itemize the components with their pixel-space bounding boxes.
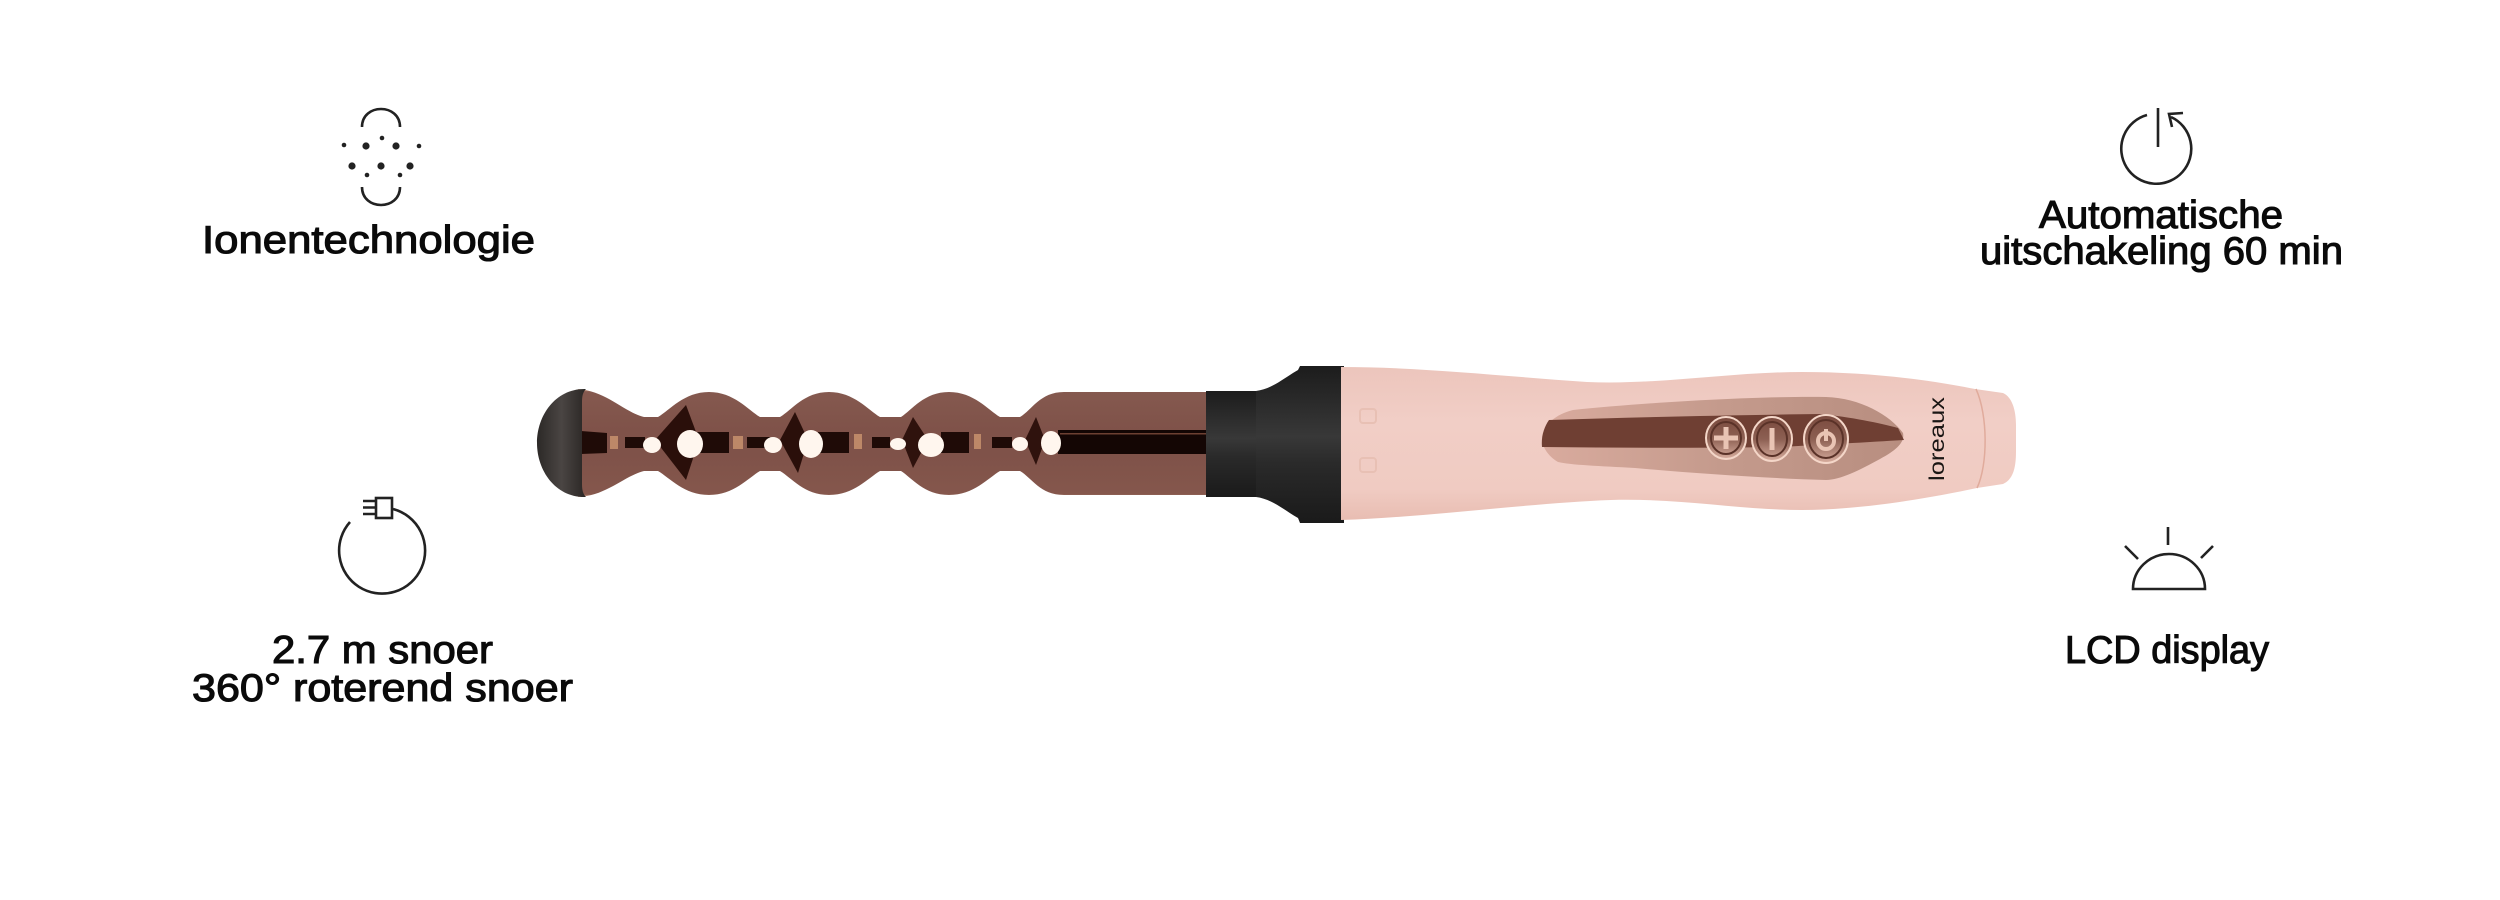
control panel: dark reflection band	[1542, 414, 1904, 448]
handle: end-cap seam	[1976, 389, 1985, 488]
feature: cord	[192, 498, 573, 710]
barrel reflections: dark diamonds	[655, 405, 699, 480]
handle: embossed marks	[1360, 409, 1376, 472]
brand logo: loreaux	[1926, 396, 1949, 481]
feature: ion technology	[202, 109, 535, 262]
product: curling iron	[537, 366, 2016, 523]
button: power	[1804, 415, 1848, 463]
label: Ionentechnologie	[202, 219, 535, 262]
label: 2.7 m snoer	[272, 629, 493, 672]
feature: LCD display	[2065, 527, 2269, 672]
barrel reflections: white highlights	[643, 430, 1061, 458]
icon: dome with rays	[2125, 527, 2213, 589]
icon: coiled cord with plug	[339, 498, 425, 594]
handle: pink body	[1341, 367, 2016, 520]
barrel reflections: dark bands	[581, 431, 1012, 454]
icon: ions	[342, 109, 421, 205]
label	[192, 629, 573, 710]
label: Automatische	[2039, 194, 2283, 237]
tip: black rounded cap	[537, 389, 586, 497]
label	[1980, 194, 2343, 273]
label: LCD display	[2065, 629, 2269, 672]
button: minus	[1752, 417, 1792, 461]
collar: black sleeve	[1206, 391, 1257, 497]
label: uitschakeling 60 min	[1980, 230, 2343, 273]
feature: auto shut-off	[1980, 108, 2343, 273]
barrel: beaded rose-gold rod	[578, 389, 1207, 497]
barrel reflection: dark band on straight section	[1058, 430, 1206, 454]
collar: flared black cone	[1256, 366, 1344, 523]
barrel reflections: copper glints	[610, 434, 981, 449]
button: plus	[1706, 417, 1746, 459]
label: 360° roterend snoer	[192, 667, 573, 710]
icon: power with return arrow	[2121, 108, 2191, 184]
control panel: mirrored window	[1542, 397, 1904, 480]
